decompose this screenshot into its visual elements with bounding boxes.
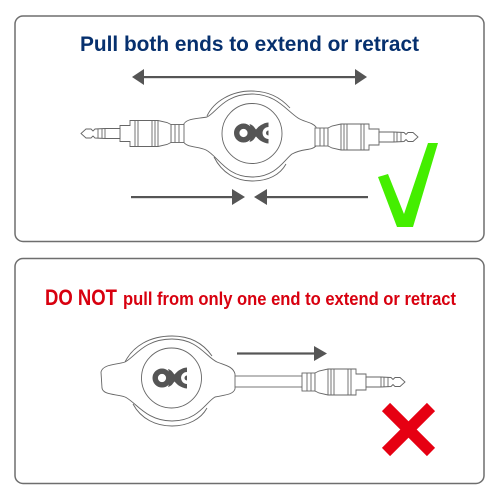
heading: do not pull from one end: DO NOT (45, 285, 117, 310)
icon: red cross (386, 407, 431, 452)
connector: top left plug (81, 120, 184, 146)
retractable cable: bottom (101, 336, 303, 426)
heading: do not pull from one end (45, 285, 456, 310)
arrow: pull right (237, 346, 327, 361)
reel body (183, 94, 316, 177)
reel inner circle (142, 348, 202, 408)
panel: incorrect usage (15, 258, 484, 484)
connector: bottom plug (302, 369, 405, 395)
reel body (101, 339, 235, 421)
reel rear arcs (207, 91, 290, 116)
connector: top right plug (315, 124, 418, 150)
heading: do not pull from one end: pull from only one end to extend or retract (123, 289, 456, 309)
logo (155, 368, 187, 388)
icon: green check mark (378, 143, 438, 227)
reel inner circle (222, 104, 282, 164)
arrow: inward from right (254, 189, 368, 205)
panel: correct usage (15, 16, 484, 242)
arrow: extend double-headed (132, 69, 367, 85)
logo (237, 124, 268, 142)
heading: pull both ends: Pull both ends to extend or retract (80, 32, 419, 56)
retractable cable: top (183, 91, 316, 181)
arrow: inward from left (131, 189, 245, 205)
reel rear arcs (125, 336, 212, 362)
cable (235, 376, 303, 387)
